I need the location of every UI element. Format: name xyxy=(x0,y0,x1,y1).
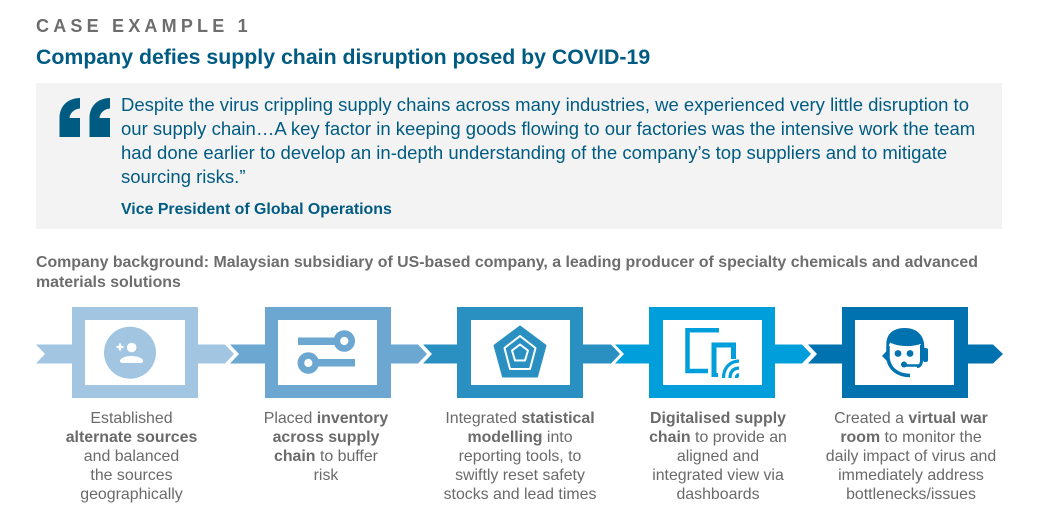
caption 2: risk xyxy=(314,467,338,484)
caption 5: to monitor the xyxy=(880,429,982,446)
caption 2: across supply xyxy=(273,429,380,446)
caption 4: chain xyxy=(649,429,691,446)
eyebrow: case example label: CASE EXAMPLE 1 xyxy=(36,16,252,36)
caption 5: bottlenecks/issues xyxy=(846,486,976,503)
ribbon and frame 5 xyxy=(808,307,1003,398)
icon: support agent with headset xyxy=(882,328,928,376)
caption 1: geographically xyxy=(80,486,183,503)
panel: quote xyxy=(36,83,1002,229)
caption 1: alternate sources xyxy=(66,429,197,446)
quote text: our supply chain…A key factor in keeping goods flowing to our factories was the intensive work the team xyxy=(121,118,975,139)
caption 3: stocks and lead times xyxy=(444,486,596,503)
caption 4: aligned and xyxy=(677,448,759,465)
caption 5: immediately address xyxy=(838,467,984,484)
caption 4: integrated view via xyxy=(652,467,784,484)
icon: sliders xyxy=(298,334,355,370)
caption 4: Digitalised supply xyxy=(650,410,786,427)
caption 4: to provide an xyxy=(691,429,787,446)
ribbon and frame 1 xyxy=(36,307,234,398)
quote text: sourcing risks.” xyxy=(121,166,246,187)
caption 5: room xyxy=(840,429,880,446)
caption 3: Integrated xyxy=(445,410,521,427)
caption 4: dashboards xyxy=(676,486,760,503)
caption 2: inventory xyxy=(317,410,388,427)
step 4: digitalised supply chain xyxy=(615,307,811,503)
quote text: Despite the virus crippling supply chains across many industries, we experienced very little disruption to xyxy=(121,94,969,115)
ribbon and frame 2 xyxy=(230,307,427,398)
caption 1: Established xyxy=(90,410,173,427)
caption 3: modelling xyxy=(467,429,542,446)
icon: add person xyxy=(104,327,156,379)
caption 5: virtual war xyxy=(908,410,988,427)
step 5: virtual war room xyxy=(808,307,1003,503)
icon: nested pentagons xyxy=(494,326,546,376)
caption 3: reporting tools, to xyxy=(459,448,582,465)
caption 1: and balanced xyxy=(84,448,179,465)
title: Company defies supply chain disruption posed by COVID-19 xyxy=(36,45,650,69)
caption 5: daily impact of virus and xyxy=(826,448,996,465)
quote text: had done earlier to develop an in-depth understanding of the company’s top suppliers and to mitigate xyxy=(121,142,947,163)
step 3: statistical modelling xyxy=(423,307,620,503)
company background text: materials solutions xyxy=(36,274,181,291)
caption 3: swiftly reset safety xyxy=(455,467,585,484)
caption 2: chain xyxy=(274,448,316,465)
caption 2: to buffer xyxy=(316,448,379,465)
company background text: Company background: Malaysian subsidiary of US-based company, a leading producer of specialty chemicals and advanced xyxy=(36,254,978,271)
ribbon and frame 4 xyxy=(615,307,811,398)
caption 5: Created a xyxy=(834,410,908,427)
ribbon and frame 3 xyxy=(423,307,620,398)
icon: quotation marks xyxy=(60,98,110,137)
caption 1: the sources xyxy=(90,467,173,484)
caption 3: into xyxy=(542,429,573,446)
step 2: inventory xyxy=(230,307,427,484)
caption 3: statistical xyxy=(521,410,595,427)
icon: devices with wifi xyxy=(688,330,740,378)
quote text xyxy=(121,94,975,187)
step 1: alternate sources xyxy=(36,307,234,503)
company background text xyxy=(36,254,978,291)
caption 2: Placed xyxy=(264,410,317,427)
quote attribution: Vice President of Global Operations xyxy=(121,201,392,218)
